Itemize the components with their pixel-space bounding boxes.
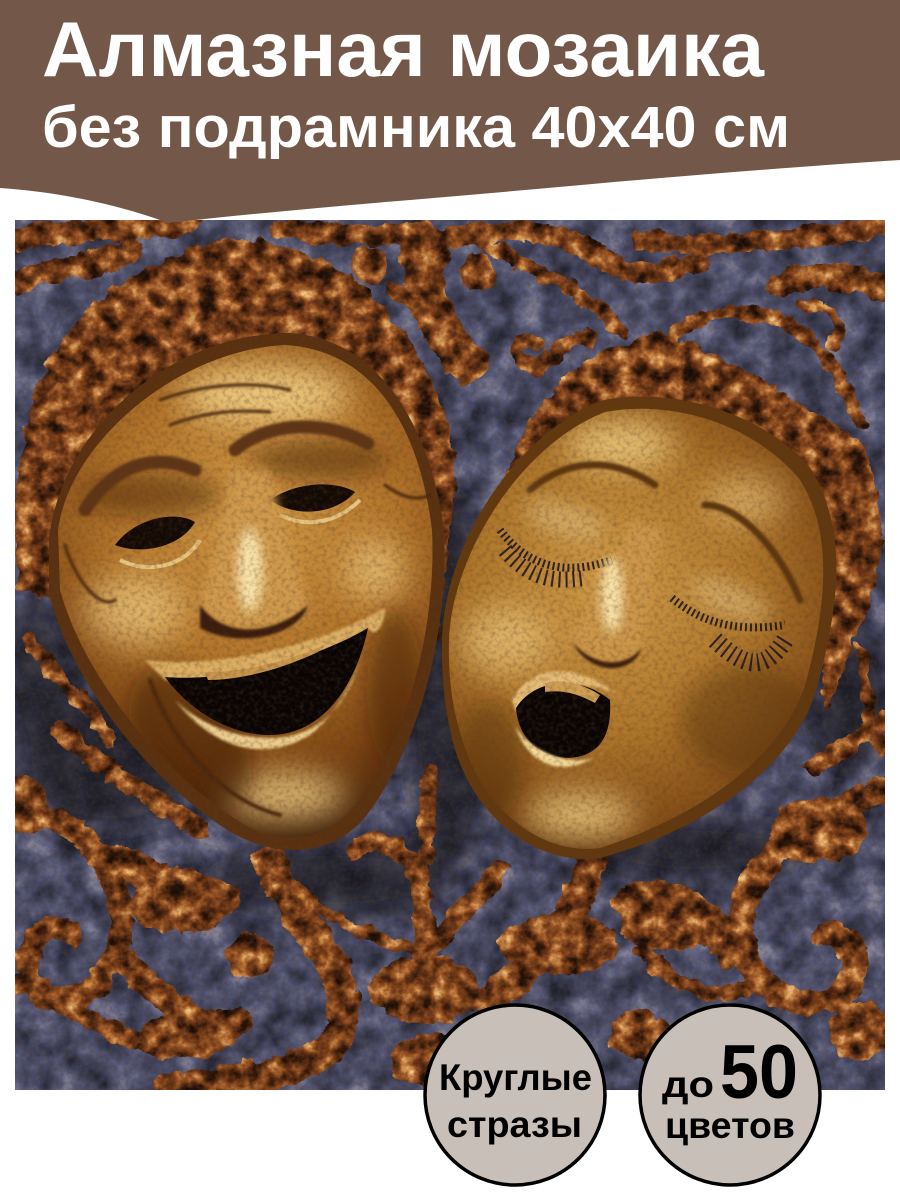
badge: up to 50 colours: цветов bbox=[665, 1105, 795, 1146]
right mask brows bbox=[530, 465, 800, 600]
artwork background panel bbox=[15, 220, 885, 1090]
lower ornaments bbox=[12, 640, 890, 1088]
right mask crown ornament bbox=[503, 333, 882, 715]
title: line 2: без подрамника 40х40 см bbox=[42, 95, 790, 160]
left mask: laughing bbox=[15, 240, 455, 850]
top ornaments bbox=[15, 222, 885, 425]
left mask upper lip bbox=[145, 608, 385, 682]
badge circle bbox=[640, 1005, 820, 1185]
artwork: theatre masks bbox=[10, 220, 890, 1090]
right mask upper lip bbox=[512, 671, 618, 712]
left mask hair ornament bbox=[15, 240, 455, 640]
badge: up to 50 colours: 50 bbox=[720, 1030, 798, 1115]
badge: up to 50 colours bbox=[640, 1005, 820, 1185]
title: line 1: Алмазная мозаика bbox=[42, 5, 765, 93]
right mask rim bbox=[442, 397, 836, 859]
left mask face bbox=[58, 345, 433, 838]
badge text: до bbox=[662, 1064, 714, 1105]
right mask: singing bbox=[442, 333, 882, 859]
badge: round rhinestones bbox=[425, 1005, 605, 1185]
banner shape bbox=[0, 0, 900, 223]
left mask wrinkles bbox=[65, 385, 430, 815]
texture overlay bbox=[15, 220, 885, 1090]
right mask face bbox=[449, 409, 823, 849]
background shadows bbox=[10, 490, 890, 915]
badge text: Круглые bbox=[439, 1057, 592, 1098]
right mask nose bbox=[572, 520, 665, 668]
badge: round rhinestones: стразы bbox=[447, 1104, 582, 1145]
right mask teeth bbox=[545, 681, 600, 703]
right mask shading and highlights bbox=[455, 421, 820, 837]
left mask teeth bbox=[205, 645, 325, 680]
badge circle bbox=[425, 1005, 605, 1185]
left mask mouth bbox=[165, 628, 368, 735]
right mask lashes bbox=[500, 530, 785, 663]
left mask eyes bbox=[115, 484, 360, 567]
left mask nose bbox=[200, 470, 308, 638]
header banner bbox=[0, 0, 900, 223]
right mask eyelids bbox=[520, 492, 775, 631]
left mask shading and highlights bbox=[80, 365, 423, 834]
left mask lower lip bbox=[175, 660, 360, 749]
right mask mouth bbox=[516, 683, 610, 758]
left mask rim bbox=[49, 333, 444, 850]
right mask lower lip bbox=[515, 725, 605, 767]
left mask brows bbox=[85, 427, 370, 510]
